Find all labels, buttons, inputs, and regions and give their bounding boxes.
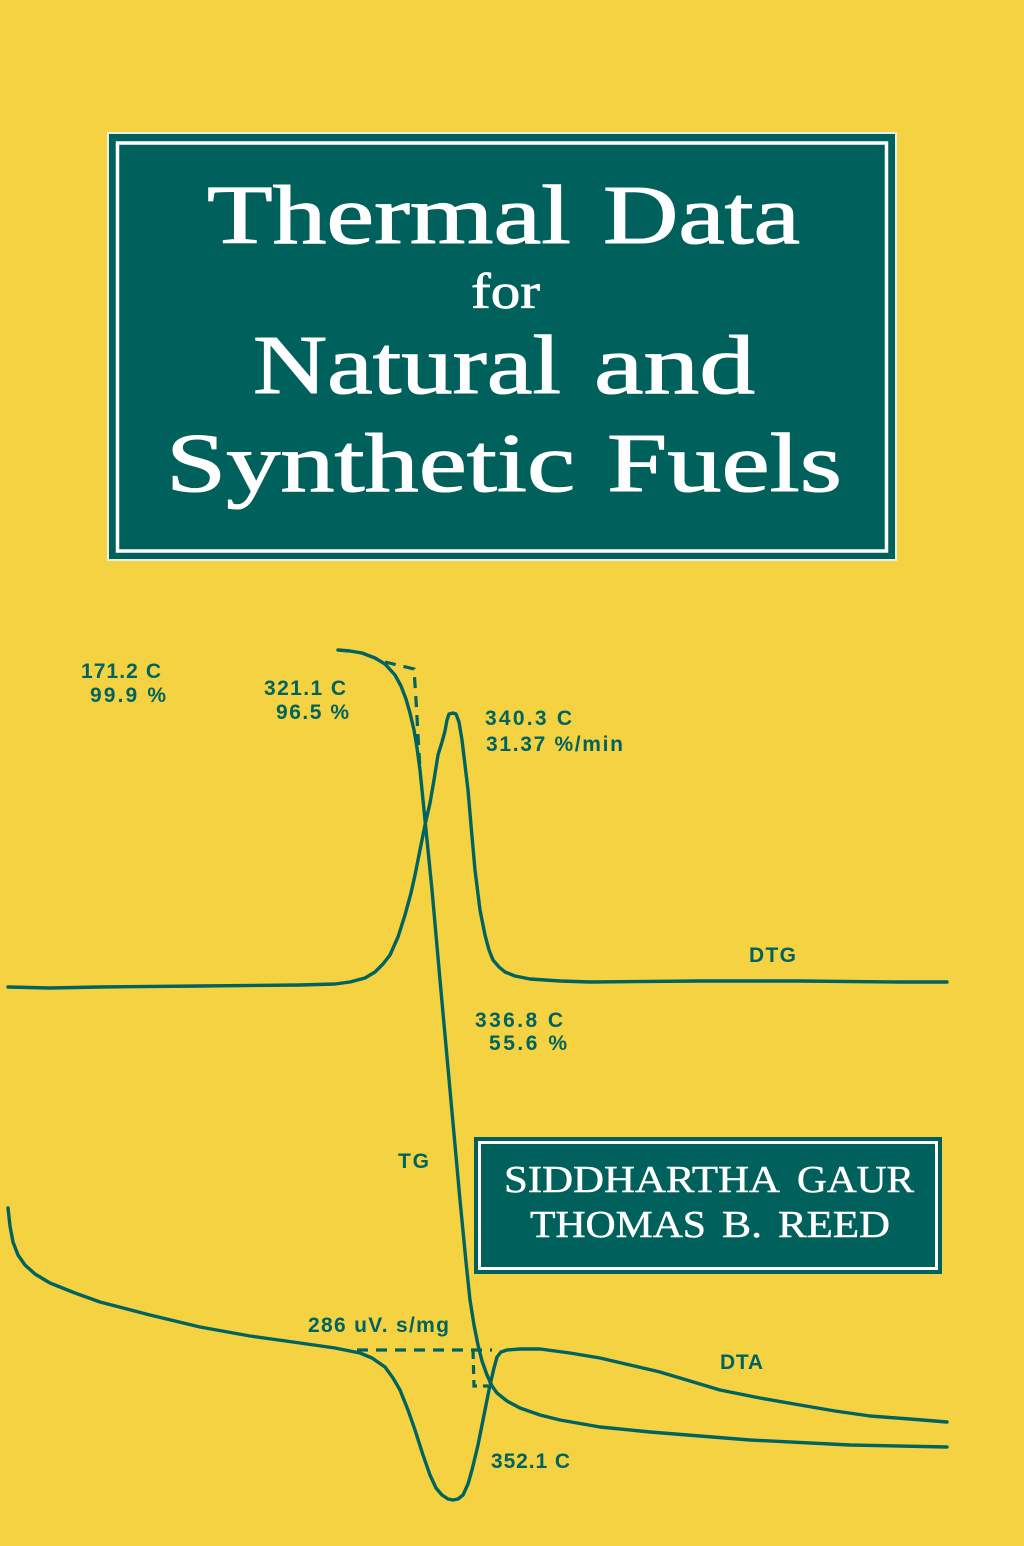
heading: title line 2: for <box>471 263 540 319</box>
panel: title <box>108 133 896 560</box>
heading: title line 1 <box>207 169 800 262</box>
author: Thomas B. Reed: B. <box>722 1204 762 1246</box>
label: 99.9 %: 99.9 % <box>90 684 166 707</box>
dashed tangent: onset top <box>385 662 420 770</box>
label: 96.5 %: 96.5 % <box>276 701 349 724</box>
label: 340.3 C: 340.3 C <box>485 707 572 730</box>
dashed tangent: DTA drop <box>473 1350 488 1386</box>
heading: title line 3 <box>253 319 755 412</box>
label: TG: TG <box>398 1150 429 1173</box>
author: Thomas B. Reed: REED <box>778 1204 890 1246</box>
DTG curve <box>8 713 947 988</box>
label: 286 uV. s/mg: 286 uV. s/mg <box>308 1314 449 1337</box>
heading: title line 4 <box>166 417 842 510</box>
chart: thermal analysis curves <box>8 650 947 1500</box>
label: 171.2 C: 171.2 C <box>81 660 161 683</box>
heading: title line 3: Natural <box>253 319 561 412</box>
DTA curve <box>8 1208 947 1500</box>
label: 352.1 C: 352.1 C <box>491 1450 570 1473</box>
heading: title line 4: Fuels <box>607 417 842 510</box>
author: Siddhartha Gaur <box>504 1159 915 1201</box>
heading: title line 1: Thermal <box>207 169 571 262</box>
author: Siddhartha Gaur: SIDDHARTHA <box>504 1159 781 1201</box>
label: 321.1 C: 321.1 C <box>264 677 346 700</box>
panel: authors <box>474 1137 942 1274</box>
TG curve <box>338 650 947 1447</box>
label: DTG: DTG <box>749 944 796 967</box>
heading: title line 1: Data <box>603 169 800 262</box>
heading: title line 3: and <box>594 319 755 412</box>
label: 31.37 %/min: 31.37 %/min <box>486 733 623 756</box>
heading: title line 4: Synthetic <box>166 417 575 510</box>
label: DTA: DTA <box>720 1351 763 1374</box>
author: Siddhartha Gaur: GAUR <box>797 1159 915 1201</box>
dashed tangent: DTA baseline <box>357 1348 492 1352</box>
label: 336.8 C: 336.8 C <box>475 1009 563 1032</box>
author: Thomas B. Reed: THOMAS <box>530 1204 706 1246</box>
label: 55.6 %: 55.6 % <box>489 1032 567 1055</box>
author: Thomas B. Reed <box>530 1204 890 1246</box>
